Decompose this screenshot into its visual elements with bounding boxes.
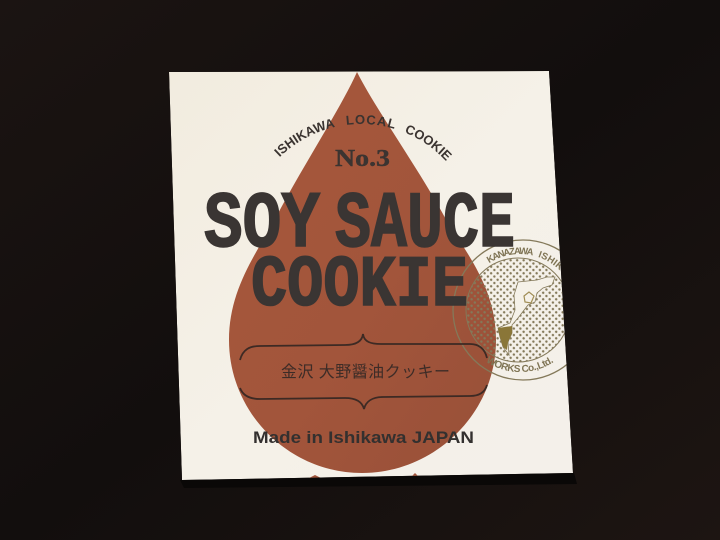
emblem outer ring [452,239,567,381]
box shadow [180,473,577,488]
bracket frame bottom [240,385,487,409]
soy sauce drop [229,72,496,473]
map small outline detail [524,292,534,303]
box [169,71,573,480]
emblem: map seal: ISHIK [538,251,561,270]
emblem text top: KANAZAWA [486,247,533,263]
bracket frame top [240,334,487,360]
Japanese product name: 金沢 大野醤油クッキー [281,363,450,381]
origin line: Made in Ishikawa JAPAN [253,429,474,447]
title line 1: SOY [204,180,320,271]
photo scene: cookie box on dark table [169,71,720,540]
bottom flap notches [309,475,320,478]
emblem: map seal [452,239,567,381]
title line 2: COOKIE [251,245,468,327]
emblem dotted disc [466,258,570,362]
Ishikawa map [498,277,555,355]
title line 1: SAUCE [335,180,515,271]
title line 1 [204,180,515,271]
arched tagline: COOKIE [406,126,452,161]
box face [169,71,573,480]
number label: No.3 [335,146,390,172]
emblem text bottom: WORKS Co.,Ltd. [488,356,554,372]
arched tagline [274,114,452,161]
map gold region [498,326,512,350]
arched tagline: ISHIKAWA [274,119,335,157]
arched tagline: LOCAL [346,114,394,129]
